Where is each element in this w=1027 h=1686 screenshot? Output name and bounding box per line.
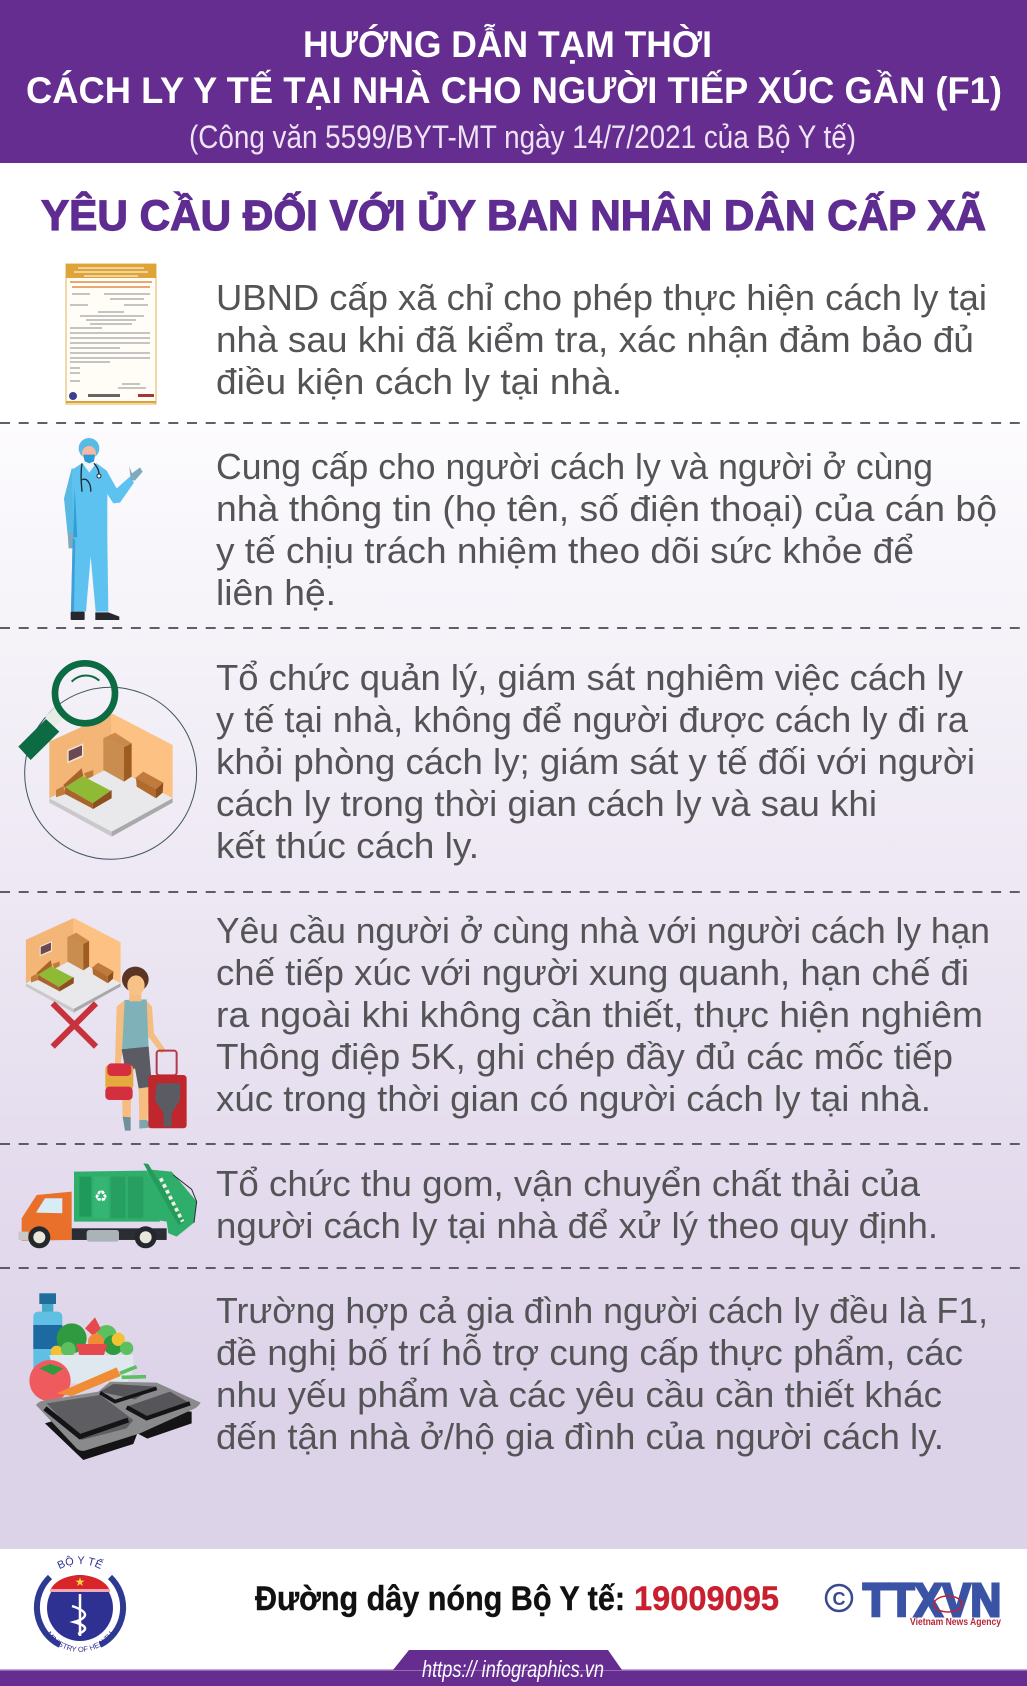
icon: garbage truck: ♻ [94,1188,108,1206]
logo: Ministry of Health: BỘ Y TẾ [57,1556,104,1569]
text block 2: liên hệ. [216,572,336,613]
panel background gradient [0,423,1027,1549]
hotline: 19009095 [634,1580,779,1618]
text block 4 [216,910,990,1119]
logo: TTXVN: C [832,1589,846,1609]
icon: document form [66,264,156,404]
text block 6: đến tận nhà ở/hộ gia đình của người cách ly. [216,1416,944,1457]
title line 2: CÁCH LY Y TẾ TẠI NHÀ CHO NGƯỜI TIẾP XÚC GẦN (F1) [26,69,1002,111]
text block 3 [216,657,975,866]
logo: Ministry of Health [34,1556,126,1652]
text block 4: Thông điệp 5K, ghi chép đầy đủ các mốc tiếp [216,1036,953,1077]
text block 6: Trường hợp cả gia đình người cách ly đều là F1, [216,1290,988,1331]
text block 4: Yêu cầu người ở cùng nhà với người cách ly hạn [216,910,990,951]
text block 5: người cách ly tại nhà để xử lý theo quy định. [216,1205,938,1246]
text block 1: nhà sau khi đã kiểm tra, xác nhận đảm bảo đủ [216,319,974,360]
subtitle: (Công văn 5599/BYT-MT ngày 14/7/2021 của Bộ Y tế) [189,119,856,155]
text block 2: nhà thông tin (họ tên, số điện thoại) của cán bộ [216,488,997,529]
text block 5: Tổ chức thu gom, vận chuyển chất thải của [216,1163,921,1204]
bottom bar with url tab: https:// infographics.vn [422,1656,604,1682]
text block 3: Tổ chức quản lý, giám sát nghiêm việc cách ly [216,657,963,698]
text block 3: y tế tại nhà, không để người được cách ly đi ra [216,699,969,740]
logo: Ministry of Health: ★ [75,1575,85,1589]
text block 1: UBND cấp xã chỉ cho phép thực hiện cách ly tại [216,277,987,318]
text block 6 [216,1290,988,1457]
footer panel [0,1549,1027,1670]
text block 3: cách ly trong thời gian cách ly và sau khi [216,783,877,824]
logo: TTXVN: TTXVN [863,1574,1001,1626]
bottom bar with url tab [0,1650,1027,1686]
text block 5 [216,1163,938,1246]
text block 1 [216,277,987,402]
text block 2 [216,446,997,613]
icon: magnifier over room [18,663,197,859]
text block 4: ra ngoài khi không cần thiết, thực hiện nghiêm [216,994,983,1035]
text block 6: đề nghị bố trí hỗ trợ cung cấp thực phẩm, các [216,1332,963,1373]
text block 6: nhu yếu phẩm và các yêu cầu cần thiết khác [216,1374,942,1415]
text block 4: xúc trong thời gian có người cách ly tại nhà. [216,1078,931,1119]
text block 3: khỏi phòng cách ly; giám sát y tế đối với người [216,741,975,782]
text block 4: chế tiếp xúc với người xung quanh, hạn chế đi [216,952,969,993]
icon: doctor [64,438,143,620]
hotline: Đường dây nóng Bộ Y tế: [255,1580,625,1618]
text block 3: kết thúc cách ly. [216,825,479,866]
icon: food and water [29,1293,201,1460]
text block 2: y tế chịu trách nhiệm theo dõi sức khỏe để [216,530,914,571]
section heading: YÊU CẦU ĐỐI VỚI ỦY BAN NHÂN DÂN CẤP XÃ [41,191,986,240]
text block 1: điều kiện cách ly tại nhà. [216,361,622,402]
logo: Ministry of Health: MINISTRY OF HEALTH [47,1631,113,1652]
logo: TTXVN: Vietnam News Agency [910,1617,1001,1628]
icon: garbage truck [18,1163,197,1248]
header banner [0,0,1027,163]
icon: room with cross and traveller [26,918,187,1131]
title line 1: HƯỚNG DẪN TẠM THỜI [303,23,712,65]
text block 2: Cung cấp cho người cách ly và người ở cùng [216,446,933,487]
